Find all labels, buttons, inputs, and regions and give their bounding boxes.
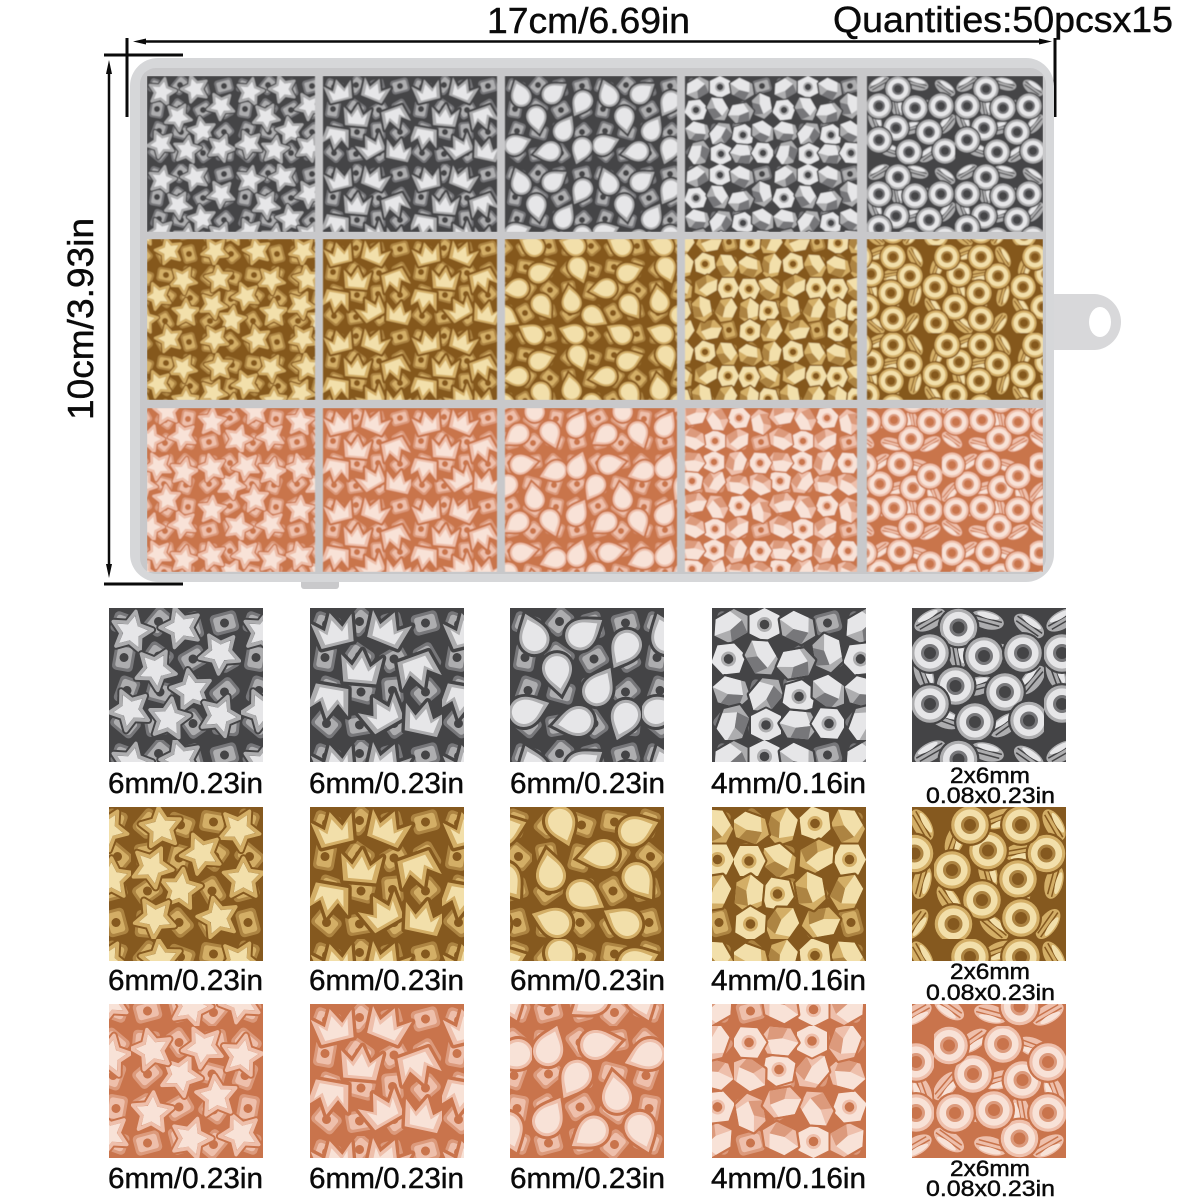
compartments: gold row — [147, 239, 1043, 400]
labels: gold row sizes: 6mm/0.23in — [510, 965, 665, 997]
swatch: gold teardrop — [510, 807, 664, 961]
labels: silver row sizes: 0.08x0.23in — [926, 783, 1055, 808]
compartments: rose gold row — [147, 408, 1043, 572]
labels: rose row sizes: 2x6mm — [950, 1156, 1030, 1181]
labels: rose row sizes: 6mm/0.23in — [510, 1163, 665, 1195]
swatch: rose crown — [310, 1004, 464, 1158]
arrow: height dimension line — [104, 55, 183, 584]
labels: rose row sizes: 6mm/0.23in — [309, 1163, 464, 1195]
swatch: gold star — [109, 807, 263, 961]
labels: silver row sizes: 6mm/0.23in — [510, 768, 665, 800]
labels: gold row sizes: 6mm/0.23in — [309, 965, 464, 997]
labels: gold row sizes: 6mm/0.23in — [108, 965, 263, 997]
swatch: gold crown — [310, 807, 464, 961]
swatch: rose star — [109, 1004, 263, 1158]
labels: silver row sizes — [108, 763, 1055, 808]
box latch — [301, 570, 339, 589]
labels: gold row sizes: 0.08x0.23in — [926, 980, 1055, 1005]
swatch: silver teardrop — [510, 608, 664, 762]
swatch: gold faceted — [712, 807, 866, 961]
labels: rose row sizes: 4mm/0.16in — [711, 1163, 866, 1195]
swatch: silver crown — [310, 608, 464, 762]
labels: rose row sizes — [108, 1156, 1055, 1200]
labels: silver row sizes: 6mm/0.23in — [108, 768, 263, 800]
hanging tab with hole — [1050, 294, 1121, 350]
swatch: silver faceted — [712, 608, 866, 762]
swatch: rose ring — [912, 1004, 1066, 1158]
panel: plastic storage box — [130, 58, 1121, 589]
labels: silver row sizes: 2x6mm — [950, 763, 1030, 788]
heading: width dimension: 17cm/6.69in — [487, 0, 690, 41]
labels: gold row sizes: 4mm/0.16in — [711, 965, 866, 997]
labels: rose row sizes: 6mm/0.23in — [108, 1163, 263, 1195]
compartments: silver row — [147, 76, 1043, 232]
swatch: rose faceted — [712, 1004, 866, 1158]
arrow: width dimension line — [127, 38, 1055, 117]
labels: gold row sizes: 2x6mm — [950, 959, 1030, 984]
swatch: rose teardrop — [510, 1004, 664, 1158]
swatch: gold ring — [912, 807, 1066, 961]
labels: silver row sizes: 4mm/0.16in — [711, 768, 866, 800]
swatch: silver star — [109, 608, 263, 762]
heading: quantities: Quantities:50pcsx15 — [833, 0, 1173, 40]
labels: silver row sizes: 6mm/0.23in — [309, 768, 464, 800]
swatch: silver ring — [912, 608, 1066, 762]
heading: height dimension: 10cm/3.93in — [60, 218, 101, 420]
labels: gold row sizes — [108, 959, 1055, 1005]
